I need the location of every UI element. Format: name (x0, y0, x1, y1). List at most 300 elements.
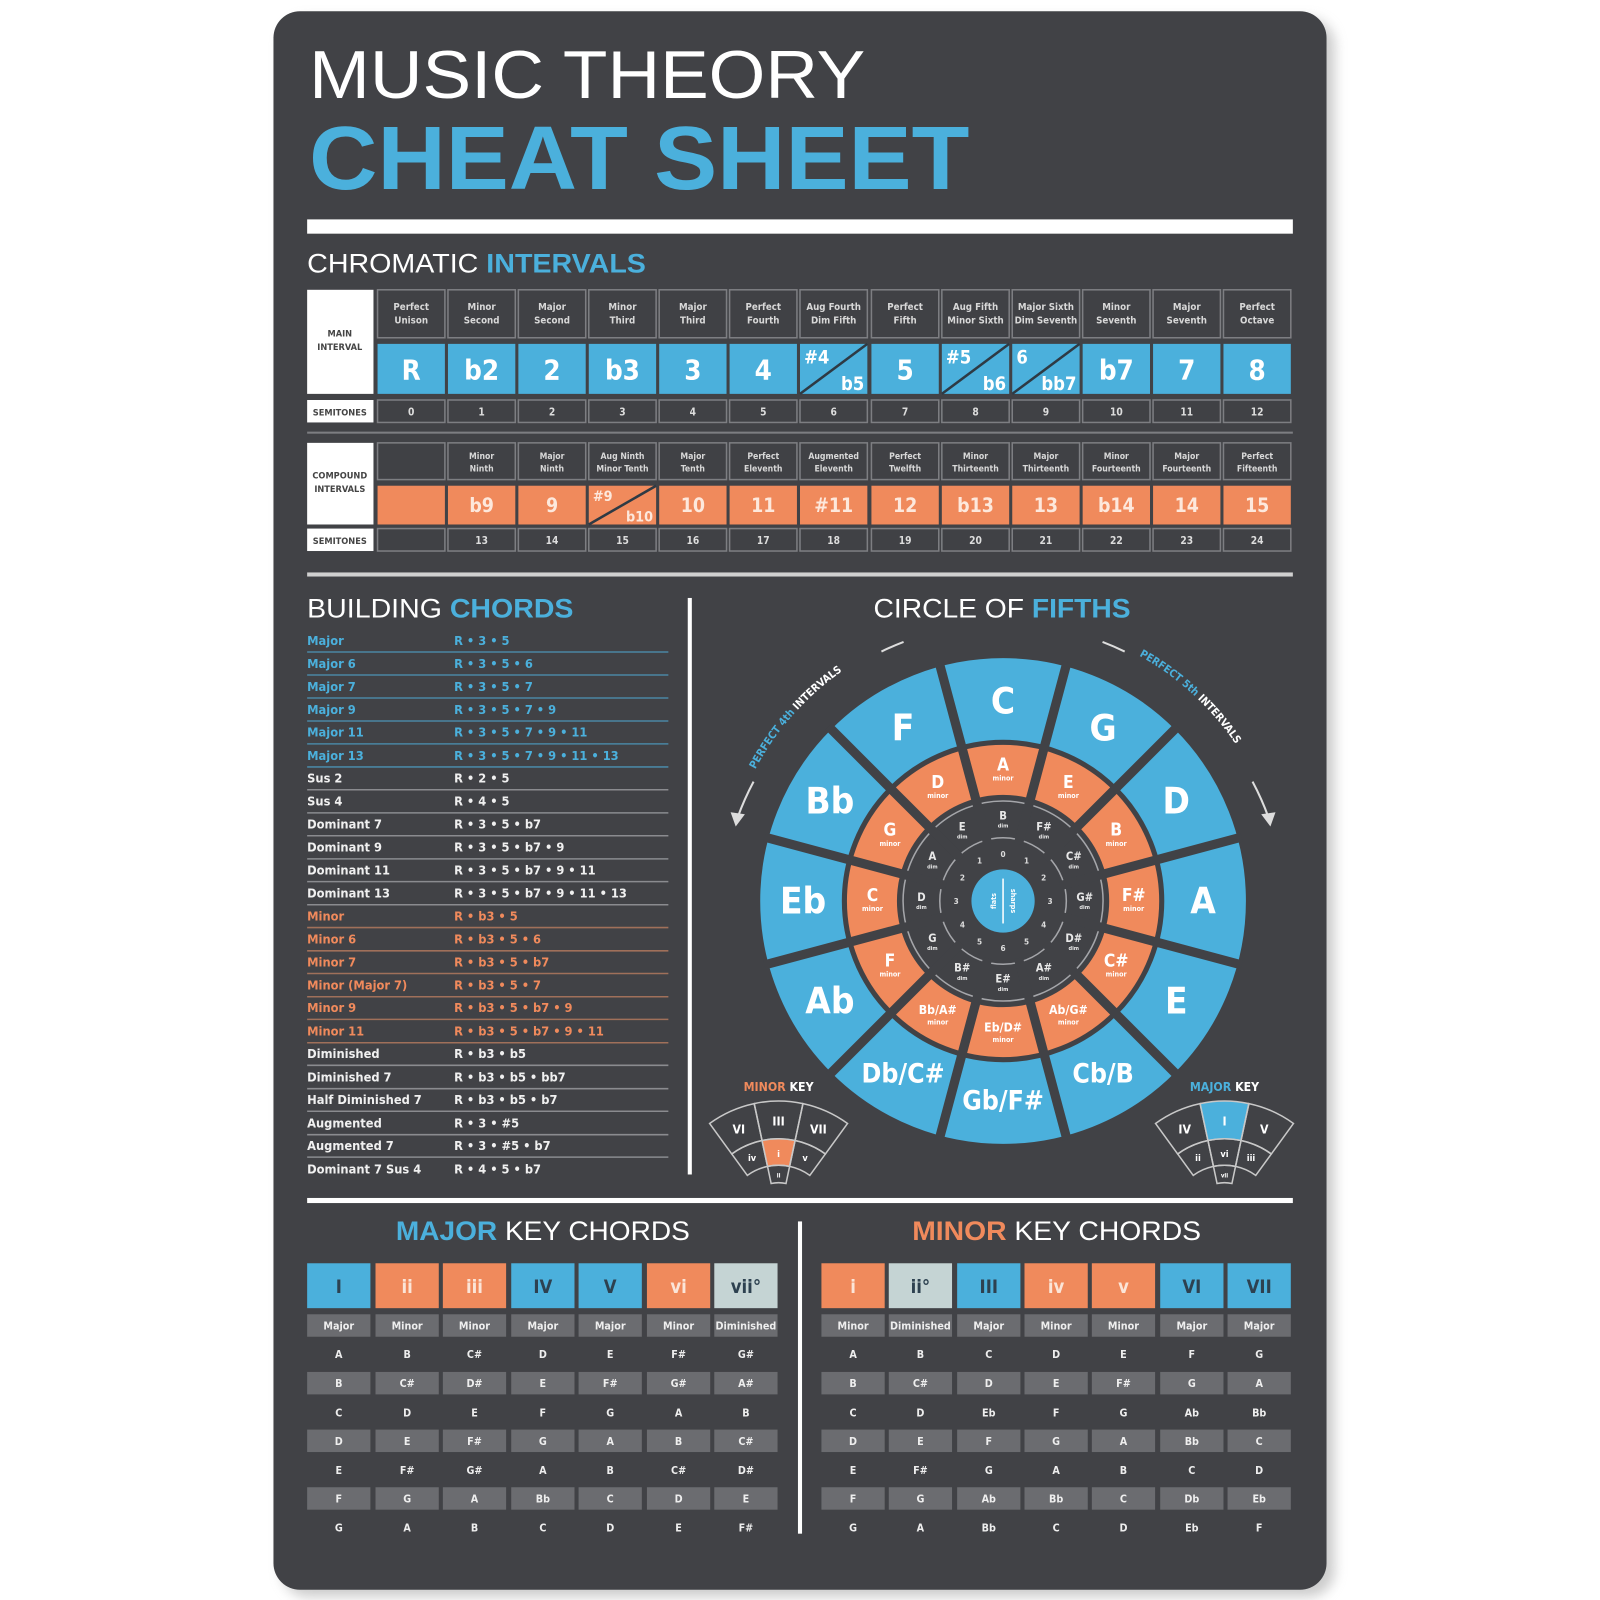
panel: building chords list: R • 3 • #5 • b7 (454, 1139, 551, 1154)
table: major key chords: I (336, 1277, 342, 1298)
table: minor key chords: Eb (1185, 1522, 1199, 1535)
table: major key chords: G (606, 1406, 614, 1419)
table: minor key chords: C (850, 1406, 857, 1419)
table: main intervals: 4 (755, 355, 772, 387)
chart: circle of fifths: C (991, 680, 1015, 723)
board (273, 11, 1327, 1590)
chart: circle of fifths: minor (1106, 970, 1128, 979)
table: main intervals: 9 (1043, 407, 1049, 418)
table: major key chords: iii (466, 1277, 483, 1298)
table: main intervals: SEMITONES (313, 407, 367, 418)
panel: building chords list: R • 3 • 5 • 7 (454, 680, 533, 695)
table: main intervals: INTERVAL (317, 342, 363, 353)
chart: circle of fifths: C# (1104, 951, 1128, 971)
chart: circle of fifths: dim (998, 824, 1008, 830)
table: major key chords: F# (739, 1522, 753, 1535)
arrow: perfect 4th intervals: PERFECT 4th INTERVALS (748, 666, 841, 769)
table: minor key chords: v (1118, 1277, 1129, 1298)
panel: building chords list: Minor (Major 7) (307, 979, 407, 994)
table: major key chords: D# (466, 1377, 483, 1390)
table: compound intervals: 22 (1110, 536, 1123, 547)
table: main intervals: Major (679, 302, 707, 313)
table: major key chords: C (335, 1406, 342, 1419)
table: minor key chords: A (1255, 1377, 1263, 1390)
panel: building chords list: R • b3 • 5 • 6 (454, 933, 541, 948)
table: compound intervals: Augmented (808, 452, 859, 462)
table: major key chords: C# (467, 1348, 482, 1361)
table: major key chords: E (471, 1406, 478, 1419)
panel: building chords list: Major 7 (307, 680, 356, 695)
table: minor key chords: D (916, 1406, 924, 1419)
icon: major key diagram: I (1222, 1115, 1227, 1129)
table: major key chords: V (604, 1277, 617, 1298)
chart: circle of fifths: D# (1065, 932, 1082, 945)
table: minor key chords: A (849, 1348, 857, 1361)
panel: building chords list: R • 3 • 5 (454, 634, 510, 649)
table: major key chords: E (607, 1348, 614, 1361)
chart: circle of fifths: dim (1039, 834, 1049, 840)
table: major key chords: C (539, 1522, 546, 1535)
table: minor key chords: Bb (1185, 1435, 1199, 1448)
table: major key chords: E (675, 1522, 682, 1535)
table: compound intervals: Twelfth (889, 464, 921, 474)
table: major key chords: D (606, 1522, 614, 1535)
table: major key chords: B (675, 1435, 682, 1448)
table: minor key chords: Bb (1252, 1406, 1266, 1419)
icon: major key diagram: IV (1178, 1123, 1191, 1137)
panel: building chords list: Minor 9 (307, 1001, 356, 1016)
table: compound intervals: 14 (1175, 494, 1199, 517)
table: main intervals: Minor (1102, 302, 1131, 313)
table: major key chords: E (743, 1493, 749, 1506)
table: main intervals: Perfect (393, 302, 429, 313)
table: minor key chords: F# (1116, 1377, 1131, 1390)
panel: building chords list: Dominant 7 (307, 818, 382, 833)
table: major key chords: D# (738, 1464, 754, 1477)
table: main intervals: Minor (608, 302, 637, 313)
chart: circle of fifths: 1 (977, 855, 982, 865)
table: main intervals: 5 (760, 407, 766, 418)
table: minor key chords: B (1120, 1464, 1127, 1477)
table: compound intervals: 11 (751, 494, 775, 517)
table: minor key chords: Diminished (890, 1320, 951, 1333)
chart: circle of fifths: 2 (960, 873, 965, 883)
table: main intervals: Third (680, 315, 706, 326)
panel: building chords list: R • b3 • 5 • b7 (454, 955, 549, 970)
icon: minor key diagram: III (772, 1115, 785, 1129)
table: minor key chords: E (850, 1464, 856, 1477)
chart: circle of fifths: Eb/D# (984, 1021, 1022, 1035)
table: minor key chords: Eb (982, 1406, 996, 1419)
panel: building chords list (307, 634, 668, 1177)
chart: circle of fifths: A (997, 755, 1009, 775)
table: compound intervals: COMPOUND (312, 471, 367, 482)
heading: circle of fifths: CIRCLE OF FIFTHS (873, 593, 1131, 623)
chart: circle of fifths: Gb/F# (962, 1086, 1044, 1117)
icon: major key diagram: MAJOR KEY (1190, 1080, 1260, 1094)
table: main intervals: Fourth (747, 315, 779, 326)
table: compound intervals: Minor Tenth (596, 464, 649, 474)
table: main intervals: MAIN (328, 329, 352, 340)
chart: circle of fifths: minor (993, 1035, 1014, 1044)
table: main intervals: Second (534, 315, 570, 326)
chart: circle of fifths: Bb (805, 780, 854, 823)
title (309, 38, 969, 209)
panel: building chords list: Diminished 7 (307, 1071, 392, 1086)
panel: building chords list: Dominant 7 Sus 4 (307, 1162, 421, 1177)
table: major key chords: G# (671, 1377, 687, 1390)
panel: building chords list: R • 3 • 5 • 7 • 9 • 11 • 13 (454, 749, 619, 764)
chart: circle of fifths (765, 662, 1242, 1140)
table: compound intervals: 15 (1245, 494, 1269, 517)
table: major key chords: Major (527, 1320, 558, 1333)
chart: circle of fifths: D (917, 891, 926, 904)
table: major key chords: B (607, 1464, 614, 1477)
table: minor key chords: Major (1244, 1320, 1275, 1333)
table: compound intervals: 21 (1040, 536, 1052, 547)
table: main intervals: Perfect (1239, 302, 1275, 313)
panel: building chords list: R • b3 • 5 • b7 • 9 (454, 1001, 573, 1016)
panel: building chords list: Major 13 (307, 749, 364, 764)
table: minor key chords: Bb (1049, 1493, 1063, 1506)
panel: building chords list: R • b3 • 5 • 7 (454, 979, 541, 994)
chart: circle of fifths: G (928, 932, 937, 945)
table: minor key chords: A (1120, 1435, 1128, 1448)
table: minor key chords: G (1120, 1406, 1128, 1419)
table: compound intervals: Major (1174, 452, 1199, 462)
chart: circle of fifths: dim (957, 834, 968, 840)
panel: building chords list: Dominant 13 (307, 887, 390, 902)
chart: circle of fifths: dim (1039, 976, 1049, 982)
table: minor key chords: G (1188, 1377, 1196, 1390)
table: compound intervals: Major (1033, 452, 1059, 462)
table: compound intervals: Aug Ninth (601, 452, 644, 462)
table: main intervals: Unison (394, 315, 428, 326)
table: main intervals: Major (538, 302, 567, 313)
icon: minor key diagram (710, 1080, 848, 1183)
chart: circle of fifths: 3 (954, 896, 959, 906)
table: compound intervals: Minor (963, 452, 988, 462)
chart: circle of fifths: minor (879, 839, 901, 848)
chart: circle of fifths: 4 (960, 919, 965, 929)
chart: circle of fifths: Bb/A# (919, 1003, 957, 1017)
chart: circle of fifths: dim (916, 905, 927, 911)
chart: circle of fifths: minor (879, 970, 901, 979)
table: minor key chords: Ab (1185, 1406, 1199, 1419)
table: main intervals: bb7 (1041, 374, 1077, 395)
table: main intervals: 12 (1251, 407, 1264, 418)
table: compound intervals: 15 (616, 536, 629, 547)
table: minor key chords: D (1052, 1348, 1060, 1361)
table: main intervals: 6 (1016, 347, 1028, 368)
panel: building chords list: R • b3 • 5 (454, 909, 518, 924)
table: major key chords (307, 1263, 778, 1535)
chart: circle of fifths: C# (1066, 850, 1082, 863)
panel: building chords list: Sus 2 (307, 772, 342, 787)
chart: circle of fifths: Cb/B (1072, 1059, 1134, 1090)
table: compound intervals: 12 (893, 494, 917, 517)
panel: building chords list: R • 3 • 5 • 6 (454, 657, 533, 672)
icon: major key diagram (1156, 1080, 1293, 1183)
table: minor key chords: E (1053, 1377, 1059, 1390)
chart: circle of fifths: C (867, 886, 878, 906)
table: compound intervals: #9 (593, 489, 613, 505)
panel: building chords list: Diminished (307, 1047, 380, 1062)
table: minor key chords: C (1188, 1464, 1195, 1477)
table: minor key chords: VI (1182, 1277, 1201, 1298)
table: compound intervals: Ninth (470, 464, 494, 474)
table: main intervals: 5 (896, 355, 914, 387)
title: CHEAT SHEET (309, 109, 969, 209)
panel: building chords list: R • b3 • 5 • b7 • 9 • 11 (454, 1025, 604, 1040)
chart: circle of fifths: minor (927, 1017, 949, 1026)
chart: circle of fifths: Ab (805, 980, 854, 1023)
panel: building chords list: R • 3 • 5 • 7 • 9 • 11 (454, 726, 587, 741)
table: compound intervals: 9 (546, 494, 558, 517)
table: minor key chords: D (1119, 1522, 1127, 1535)
chart: circle of fifths: minor (1123, 904, 1145, 913)
panel: building chords list: R • 3 • 5 • b7 (454, 818, 541, 833)
panel: building chords list: Minor 7 (307, 955, 356, 970)
table: major key chords: Minor (459, 1320, 490, 1333)
table: compound intervals: b9 (469, 494, 494, 517)
table: main intervals: Minor Sixth (947, 315, 1004, 326)
chart: circle of fifths: 5 (977, 937, 982, 947)
table: major key chords: Minor (663, 1320, 694, 1333)
table: major key chords: G# (738, 1348, 754, 1361)
table: major key chords: G (403, 1493, 411, 1506)
chart: circle of fifths: F# (1122, 886, 1146, 906)
chart: circle of fifths: B (999, 809, 1007, 822)
table: major key chords: C# (400, 1377, 415, 1390)
table: compound intervals: 16 (686, 536, 699, 547)
table: compound intervals: Perfect (747, 452, 779, 462)
panel: building chords list: Half Diminished 7 (307, 1093, 422, 1108)
chart: circle of fifths: B# (954, 962, 970, 975)
chart: circle of fifths: dim (957, 976, 968, 982)
panel: building chords list: R • 4 • 5 • b7 (454, 1162, 541, 1177)
icon: minor key diagram: v (802, 1153, 808, 1164)
table: compound intervals: 24 (1251, 536, 1264, 547)
table: major key chords: IV (533, 1277, 553, 1298)
table: major key chords: B (742, 1406, 750, 1419)
table: major key chords: B (471, 1522, 478, 1535)
table: minor key chords: C (1256, 1435, 1263, 1448)
table: main intervals: #5 (946, 347, 971, 368)
heading: chromatic intervals: CHROMATIC INTERVALS (307, 248, 646, 278)
table: compound intervals: Eleventh (814, 464, 853, 474)
chart: circle of fifths: dim (1068, 946, 1079, 952)
table: main intervals: 4 (690, 407, 696, 418)
table: compound intervals: Perfect (1241, 452, 1273, 462)
chart: circle of fifths: minor (927, 791, 949, 800)
table: minor key chords: D (849, 1435, 857, 1448)
table: compound intervals: Tenth (681, 464, 705, 474)
table: compound intervals: Thirteenth (952, 464, 999, 474)
panel: building chords list: R • 3 • 5 • b7 • 9 • 11 • 13 (454, 887, 627, 902)
table: main intervals: Minor (468, 302, 496, 313)
chart: circle of fifths: minor (1058, 1017, 1080, 1026)
table: main intervals: Dim Fifth (811, 315, 856, 326)
chart: circle of fifths: G (1090, 706, 1117, 749)
table: minor key chords: C (1120, 1493, 1127, 1506)
table: compound intervals: 23 (1180, 536, 1193, 547)
chart: circle of fifths: Eb (780, 880, 826, 923)
chart: circle of fifths: E (1063, 773, 1074, 793)
table: minor key chords: G (916, 1493, 924, 1506)
heading: major key chords: MAJOR KEY CHORDS (396, 1216, 690, 1246)
table: main intervals: R (402, 355, 421, 387)
table: major key chords: G (335, 1522, 343, 1535)
icon: major key diagram: ii (1195, 1153, 1201, 1164)
chart: circle of fifths: F# (1036, 820, 1052, 833)
table: minor key chords: Db (1184, 1493, 1199, 1506)
table: compound intervals: 19 (899, 536, 911, 547)
table: main intervals (307, 290, 1291, 422)
table: minor key chords: F (1189, 1348, 1195, 1361)
panel: building chords list: Sus 4 (307, 795, 342, 810)
table: main intervals: #4 (804, 347, 829, 368)
chart: circle of fifths: minor (993, 774, 1014, 783)
table: minor key chords: D (985, 1377, 993, 1390)
table: minor key chords: i (850, 1277, 856, 1298)
table: major key chords: Minor (392, 1320, 423, 1333)
table: compound intervals: Fourteenth (1092, 464, 1141, 474)
table: main intervals: 8 (972, 407, 979, 418)
table: major key chords: B (403, 1348, 411, 1361)
panel: building chords list: Major (307, 634, 344, 649)
table: main intervals: 2 (549, 407, 555, 418)
chart: circle of fifths: 5 (1024, 937, 1029, 947)
table: main intervals: Perfect (745, 302, 781, 313)
panel: building chords list: R • 3 • #5 (454, 1117, 519, 1132)
table: main intervals: 10 (1110, 407, 1123, 418)
table: major key chords: C# (738, 1435, 753, 1448)
table: compound intervals: Thirteenth (1023, 464, 1069, 474)
table: minor key chords: F# (913, 1464, 928, 1477)
table: compound intervals: 10 (681, 494, 705, 517)
chart: circle of fifths: dim (927, 864, 938, 870)
chart: circle of fifths: flats (989, 893, 998, 909)
table: minor key chords: F (1256, 1522, 1262, 1535)
chart: circle of fifths: A (928, 850, 936, 863)
panel: building chords list: R • b3 • b5 (454, 1047, 526, 1062)
icon: minor key diagram: iv (748, 1153, 757, 1164)
chart: circle of fifths: E (959, 820, 966, 833)
table: main intervals: Dim Seventh (1015, 315, 1077, 326)
table: major key chords: Major (323, 1320, 354, 1333)
panel: building chords list: R • 2 • 5 (454, 772, 510, 787)
chart: circle of fifths: Ab/G# (1049, 1003, 1088, 1017)
table: main intervals: b5 (841, 374, 864, 395)
table: major key chords: vi (670, 1277, 687, 1298)
table: major key chords: F# (467, 1435, 482, 1448)
table: major key chords: E (335, 1464, 342, 1477)
table: compound intervals: 17 (757, 536, 770, 547)
icon: major key diagram: V (1260, 1123, 1269, 1137)
table: major key chords: D (335, 1435, 343, 1448)
chart: circle of fifths: minor (1058, 791, 1080, 800)
panel: building chords list: Major 6 (307, 657, 356, 672)
heading: minor key chords: MINOR KEY CHORDS (912, 1216, 1201, 1246)
table: minor key chords: B (849, 1377, 857, 1390)
table: major key chords: B (335, 1377, 342, 1390)
table: compound intervals: b14 (1098, 494, 1135, 517)
table: compound intervals: 13 (1034, 494, 1058, 517)
table: major key chords: vii° (731, 1277, 761, 1298)
panel: building chords list: Augmented 7 (307, 1139, 394, 1154)
table: compound intervals: #11 (814, 494, 853, 517)
table: minor key chords: iv (1048, 1277, 1065, 1298)
panel: building chords list: Major 9 (307, 703, 356, 718)
table: minor key chords: F (1053, 1406, 1059, 1419)
table: major key chords: Diminished (716, 1320, 776, 1333)
table: major key chords: G# (466, 1464, 482, 1477)
table: compound intervals: Eleventh (744, 464, 782, 474)
table: major key chords: D (675, 1493, 683, 1506)
table: main intervals: Fifth (894, 315, 917, 326)
table: main intervals: Third (610, 315, 635, 326)
title: MUSIC THEORY (309, 38, 865, 113)
table: minor key chords: III (980, 1277, 998, 1298)
table: major key chords: C# (671, 1464, 686, 1477)
arrow: perfect 4th intervals (730, 641, 904, 826)
chart: circle of fifths: E# (995, 973, 1011, 986)
table: minor key chords: Minor (1041, 1320, 1072, 1333)
chart: circle of fifths: 4 (1041, 919, 1046, 929)
table: compound intervals: Fourteenth (1162, 464, 1211, 474)
table: major key chords: A (471, 1493, 479, 1506)
table: major key chords: A (335, 1348, 343, 1361)
chart: circle of fifths: 1 (1024, 855, 1029, 865)
table: main intervals: Octave (1240, 315, 1274, 326)
table: main intervals: 8 (1249, 355, 1266, 387)
chart: circle of fifths: 3 (1047, 896, 1053, 906)
table: major key chords: G (539, 1435, 547, 1448)
table: minor key chords (821, 1263, 1291, 1535)
table: major key chords: E (540, 1377, 546, 1390)
table: minor key chords: ii° (911, 1277, 930, 1298)
table: major key chords: F (335, 1493, 342, 1506)
table: compound intervals: Ninth (540, 464, 564, 474)
panel: building chords list: Dominant 11 (307, 863, 390, 878)
table: main intervals: Major Sixth (1018, 302, 1074, 313)
chart: circle of fifths: dim (927, 946, 938, 952)
table: main intervals: 1 (478, 407, 485, 418)
table: main intervals: 3 (619, 407, 626, 418)
chart: circle of fifths: 6 (1001, 943, 1006, 953)
chart: circle of fifths: F (892, 706, 914, 749)
table: main intervals: 7 (902, 407, 908, 418)
table: minor key chords: Major (1176, 1320, 1207, 1333)
table: minor key chords: D (1255, 1464, 1263, 1477)
table: compound intervals (307, 443, 1291, 551)
table: major key chords: C (607, 1493, 614, 1506)
table: minor key chords: F (850, 1493, 856, 1506)
chart: circle of fifths: minor (862, 904, 884, 913)
icon: minor key diagram: ii (777, 1173, 781, 1180)
table: compound intervals: INTERVALS (314, 484, 365, 495)
table: compound intervals: 20 (969, 536, 982, 547)
chart: circle of fifths: dim (1068, 864, 1079, 870)
table: major key chords: F (540, 1406, 546, 1419)
table: minor key chords: VII (1247, 1277, 1272, 1298)
table: main intervals: Seventh (1096, 315, 1137, 326)
table: minor key chords: Eb (1252, 1493, 1266, 1506)
table: minor key chords: C (985, 1348, 992, 1361)
table: major key chords: ii (401, 1277, 413, 1298)
panel: building chords list: R • b3 • b5 • b7 (454, 1093, 557, 1108)
